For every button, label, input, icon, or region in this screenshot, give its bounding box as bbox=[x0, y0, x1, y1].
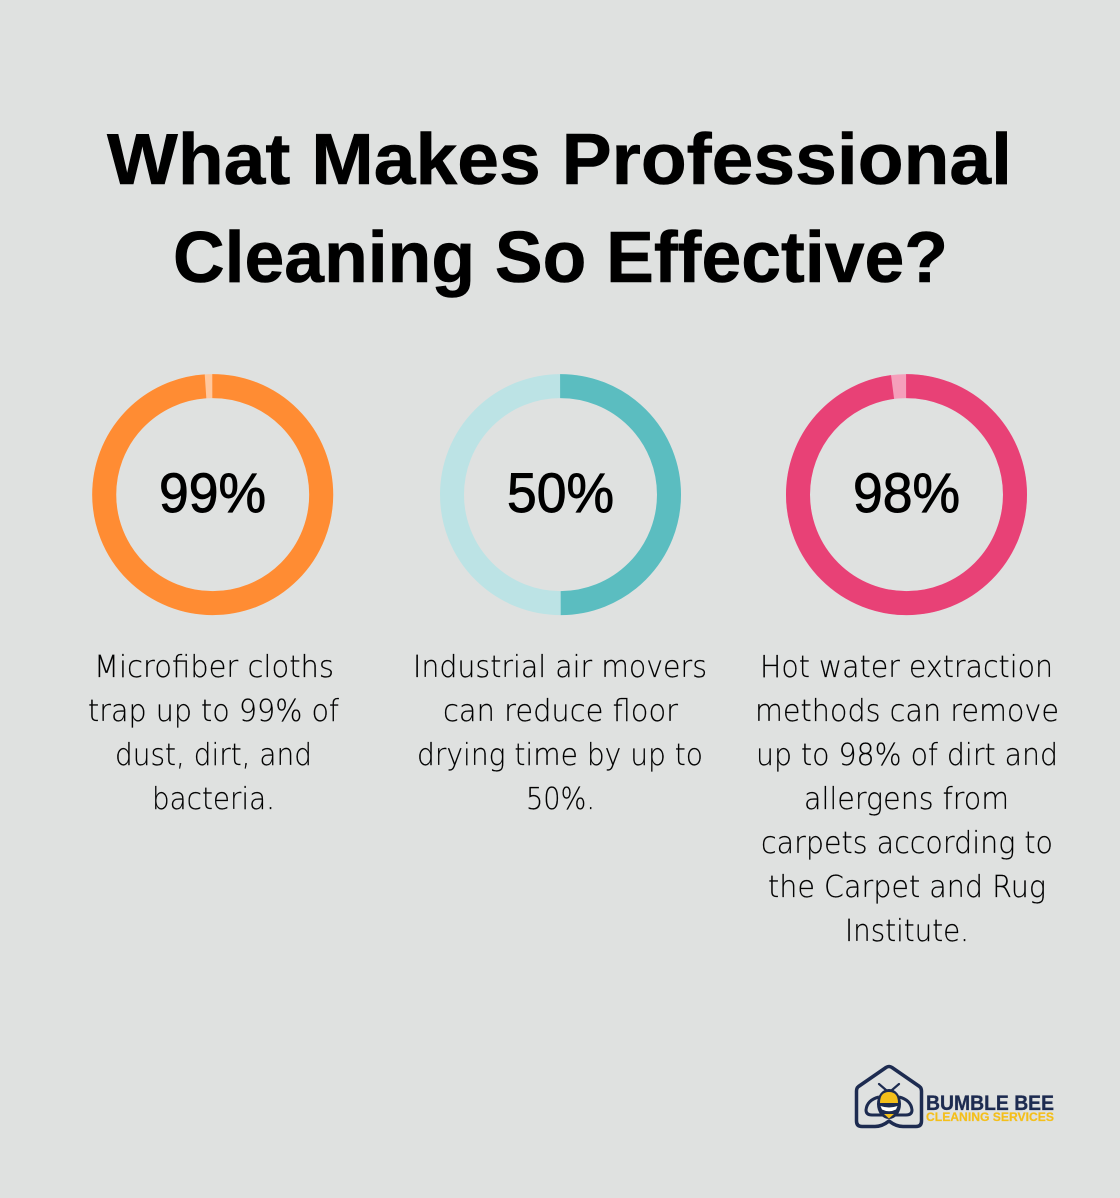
text: microfiber description: Microfiber cloths bbox=[94, 650, 334, 685]
donut chart: 99% bbox=[104, 386, 321, 603]
text: air movers description: can reduce floor bbox=[443, 694, 679, 729]
logo wordmark bbox=[926, 1092, 1054, 1124]
text: hot water description: the Carpet and Rug bbox=[768, 870, 1046, 905]
logo wordmark: BUMBLE BEE bbox=[926, 1092, 1054, 1115]
panel: hot water extraction bbox=[755, 386, 1059, 949]
title: What Makes Professional bbox=[107, 119, 1012, 200]
text: air movers description bbox=[413, 650, 707, 817]
donut chart: 99%: 99% bbox=[159, 461, 266, 524]
icon: house with bee bbox=[856, 1066, 922, 1126]
text: hot water description bbox=[755, 650, 1059, 949]
donut chart: 50% bbox=[452, 386, 669, 603]
text: air movers description: 50%. bbox=[526, 782, 595, 817]
donut chart: 98% bbox=[798, 386, 1015, 603]
text: air movers description: drying time by up to bbox=[417, 738, 703, 773]
title: Cleaning So Effective? bbox=[173, 217, 948, 298]
text: hot water description: up to 98% of dirt and bbox=[756, 738, 1058, 773]
donut chart: 50%: 50% bbox=[507, 461, 614, 524]
text: microfiber description: bacteria. bbox=[152, 782, 275, 817]
text: microfiber description: trap up to 99% of bbox=[88, 694, 339, 729]
logo wordmark: CLEANING SERVICES bbox=[926, 1112, 1054, 1124]
text: hot water description: Institute. bbox=[845, 914, 969, 949]
panel: industrial air movers bbox=[413, 386, 707, 817]
panel: microfiber cloths bbox=[88, 386, 339, 817]
title bbox=[107, 119, 1012, 298]
text: hot water description: carpets according to bbox=[761, 826, 1053, 861]
text: hot water description: Hot water extraction bbox=[760, 650, 1053, 685]
donut chart: 98%: 98% bbox=[853, 461, 960, 524]
text: microfiber description bbox=[88, 650, 339, 817]
text: microfiber description: dust, dirt, and bbox=[115, 738, 312, 773]
text: air movers description: Industrial air movers bbox=[413, 650, 707, 685]
text: hot water description: allergens from bbox=[804, 782, 1009, 817]
text: hot water description: methods can remove bbox=[755, 694, 1059, 729]
logo: Bumble Bee Cleaning Services bbox=[856, 1066, 1054, 1126]
